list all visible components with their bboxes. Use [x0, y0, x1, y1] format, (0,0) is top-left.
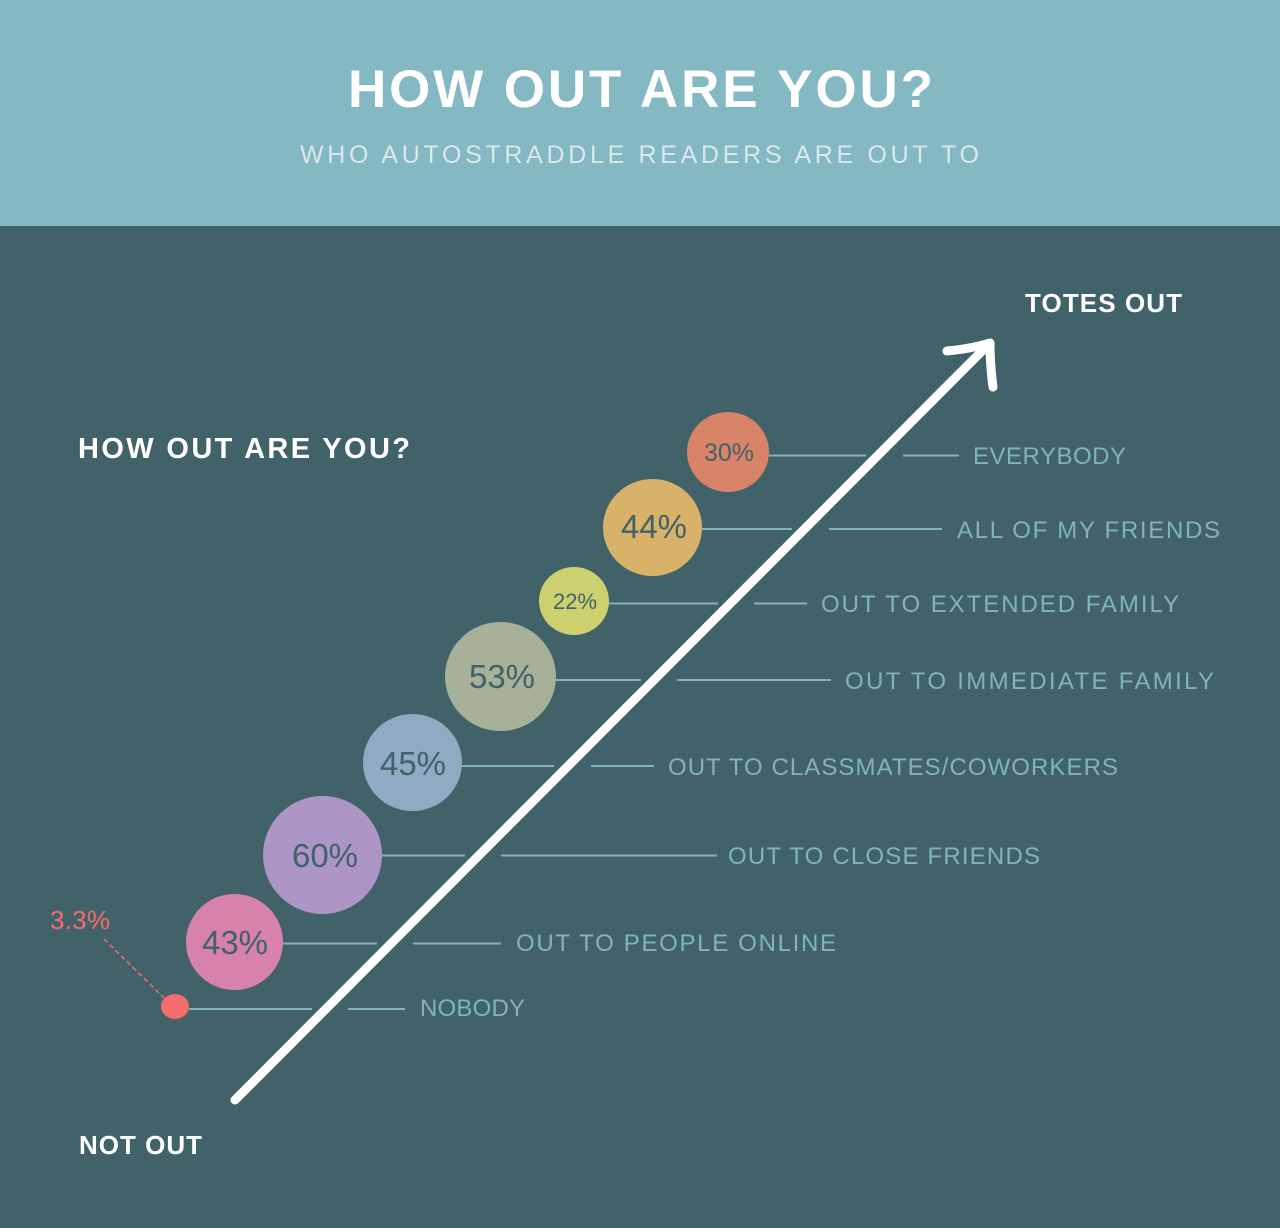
- arrow: how out scale: [235, 343, 993, 1100]
- bubble: classmates 45%: 45%: [380, 745, 446, 782]
- connector lines: [189, 456, 959, 1009]
- bubble: classmates 45%: [363, 714, 462, 811]
- label: close friends: OUT TO CLOSE FRIENDS: [728, 843, 1040, 870]
- bubble: close friends 60%: [263, 796, 382, 914]
- label: nobody: NOBODY: [420, 995, 525, 1022]
- panel: header: [0, 0, 1280, 226]
- bubble: all of my friends 44%: [603, 479, 702, 576]
- label: all of my friends: ALL OF MY FRIENDS: [957, 517, 1220, 544]
- label: people online: OUT TO PEOPLE ONLINE: [516, 930, 836, 957]
- axis label: totes out: TOTES OUT: [1025, 288, 1182, 318]
- bubble: people online 43%: 43%: [202, 924, 268, 961]
- label: everybody: EVERYBODY: [973, 443, 1126, 470]
- title: HOW OUT ARE YOU?: [348, 60, 933, 119]
- bubble: all of my friends 44%: 44%: [621, 508, 687, 545]
- bubble: immediate family 53%: [445, 622, 556, 731]
- label: classmates/coworkers: OUT TO CLASSMATES/COWORKERS: [668, 754, 1118, 781]
- bubble: nobody 3.3%: 3.3%: [50, 905, 110, 935]
- bubble: extended family 22%: 22%: [553, 589, 597, 614]
- subtitle: WHO AUTOSTRADDLE READERS ARE OUT TO: [300, 141, 979, 169]
- bubble: nobody 3.3%: [50, 905, 189, 1019]
- label: immediate family: OUT TO IMMEDIATE FAMILY: [845, 668, 1214, 695]
- bubble: extended family 22%: [539, 567, 609, 635]
- bubble: everybody 30%: [687, 412, 769, 492]
- bubble: everybody 30%: 30%: [704, 439, 754, 467]
- bubble: people online 43%: [186, 894, 283, 990]
- section heading: HOW OUT ARE YOU?: [78, 433, 410, 465]
- bubble: immediate family 53%: 53%: [469, 658, 535, 695]
- label: extended family: OUT TO EXTENDED FAMILY: [821, 591, 1179, 618]
- axis label: not out: NOT OUT: [79, 1130, 202, 1160]
- bubble: close friends 60%: 60%: [292, 837, 358, 874]
